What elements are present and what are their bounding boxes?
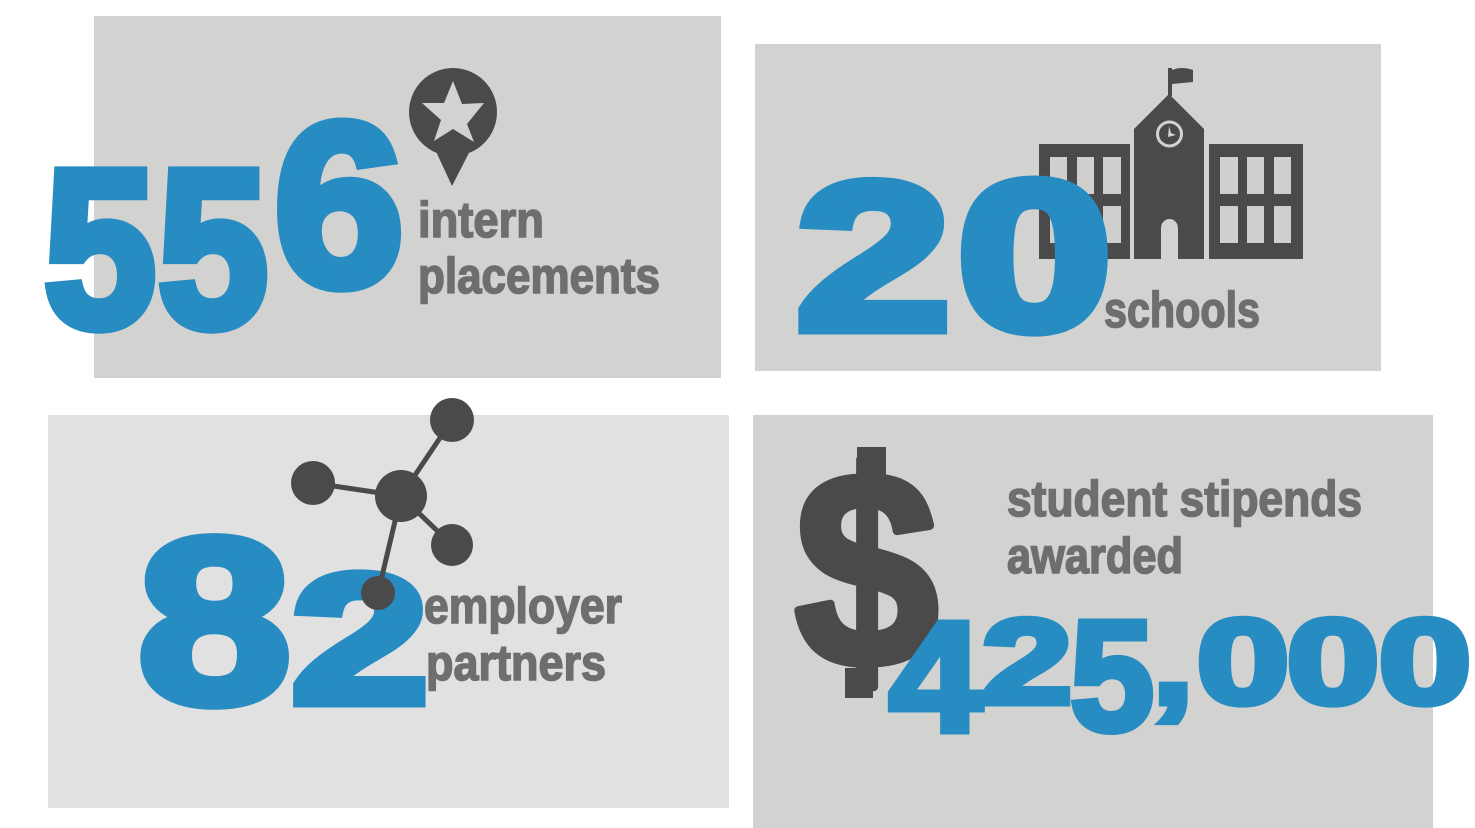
number: 425,000: 0 xyxy=(1197,595,1289,729)
number: 20: 2 xyxy=(796,139,951,374)
number: 425,000: 4 xyxy=(889,590,982,765)
number: 556 xyxy=(44,76,404,374)
panel: schools xyxy=(755,44,1381,374)
panel: intern placements xyxy=(44,16,721,378)
number: 20 xyxy=(796,137,1112,374)
panel: employer partners xyxy=(48,398,729,808)
number: 82: 2 xyxy=(292,537,428,741)
number: 556: 5 xyxy=(158,124,268,374)
label: student stipends awarded xyxy=(1007,471,1362,584)
label: intern placements xyxy=(418,192,660,304)
number: 425,000: 0 xyxy=(1379,595,1471,729)
label: intern placements: intern xyxy=(418,192,544,248)
number: 20: 0 xyxy=(957,137,1112,374)
label: student stipends awarded: student stipends xyxy=(1007,471,1362,527)
number: 425,000: 5 xyxy=(1070,589,1154,764)
icon: network nodes xyxy=(291,398,474,610)
label: student stipends awarded: awarded xyxy=(1007,528,1183,584)
number: 82 xyxy=(138,490,428,752)
icon: dollar sign: $ xyxy=(795,414,938,725)
panel: student stipends xyxy=(753,414,1471,828)
number: 82: 8 xyxy=(138,490,291,752)
label: schools: schools xyxy=(1104,282,1260,338)
number: 556: 6 xyxy=(274,76,404,335)
label: employer partners: partners xyxy=(426,635,606,691)
number: 425,000: 0 xyxy=(1287,595,1379,729)
label: employer partners xyxy=(424,578,622,691)
number: 425,000 xyxy=(889,589,1471,765)
number: 425,000: , xyxy=(1153,595,1193,729)
icon: map pin with star xyxy=(409,68,497,186)
label: intern placements: placements xyxy=(418,248,660,304)
number: 556: 5 xyxy=(44,124,156,374)
label: employer partners: employer xyxy=(424,578,622,634)
number: 425,000: 2 xyxy=(982,595,1072,729)
icon: school building xyxy=(1039,68,1303,259)
